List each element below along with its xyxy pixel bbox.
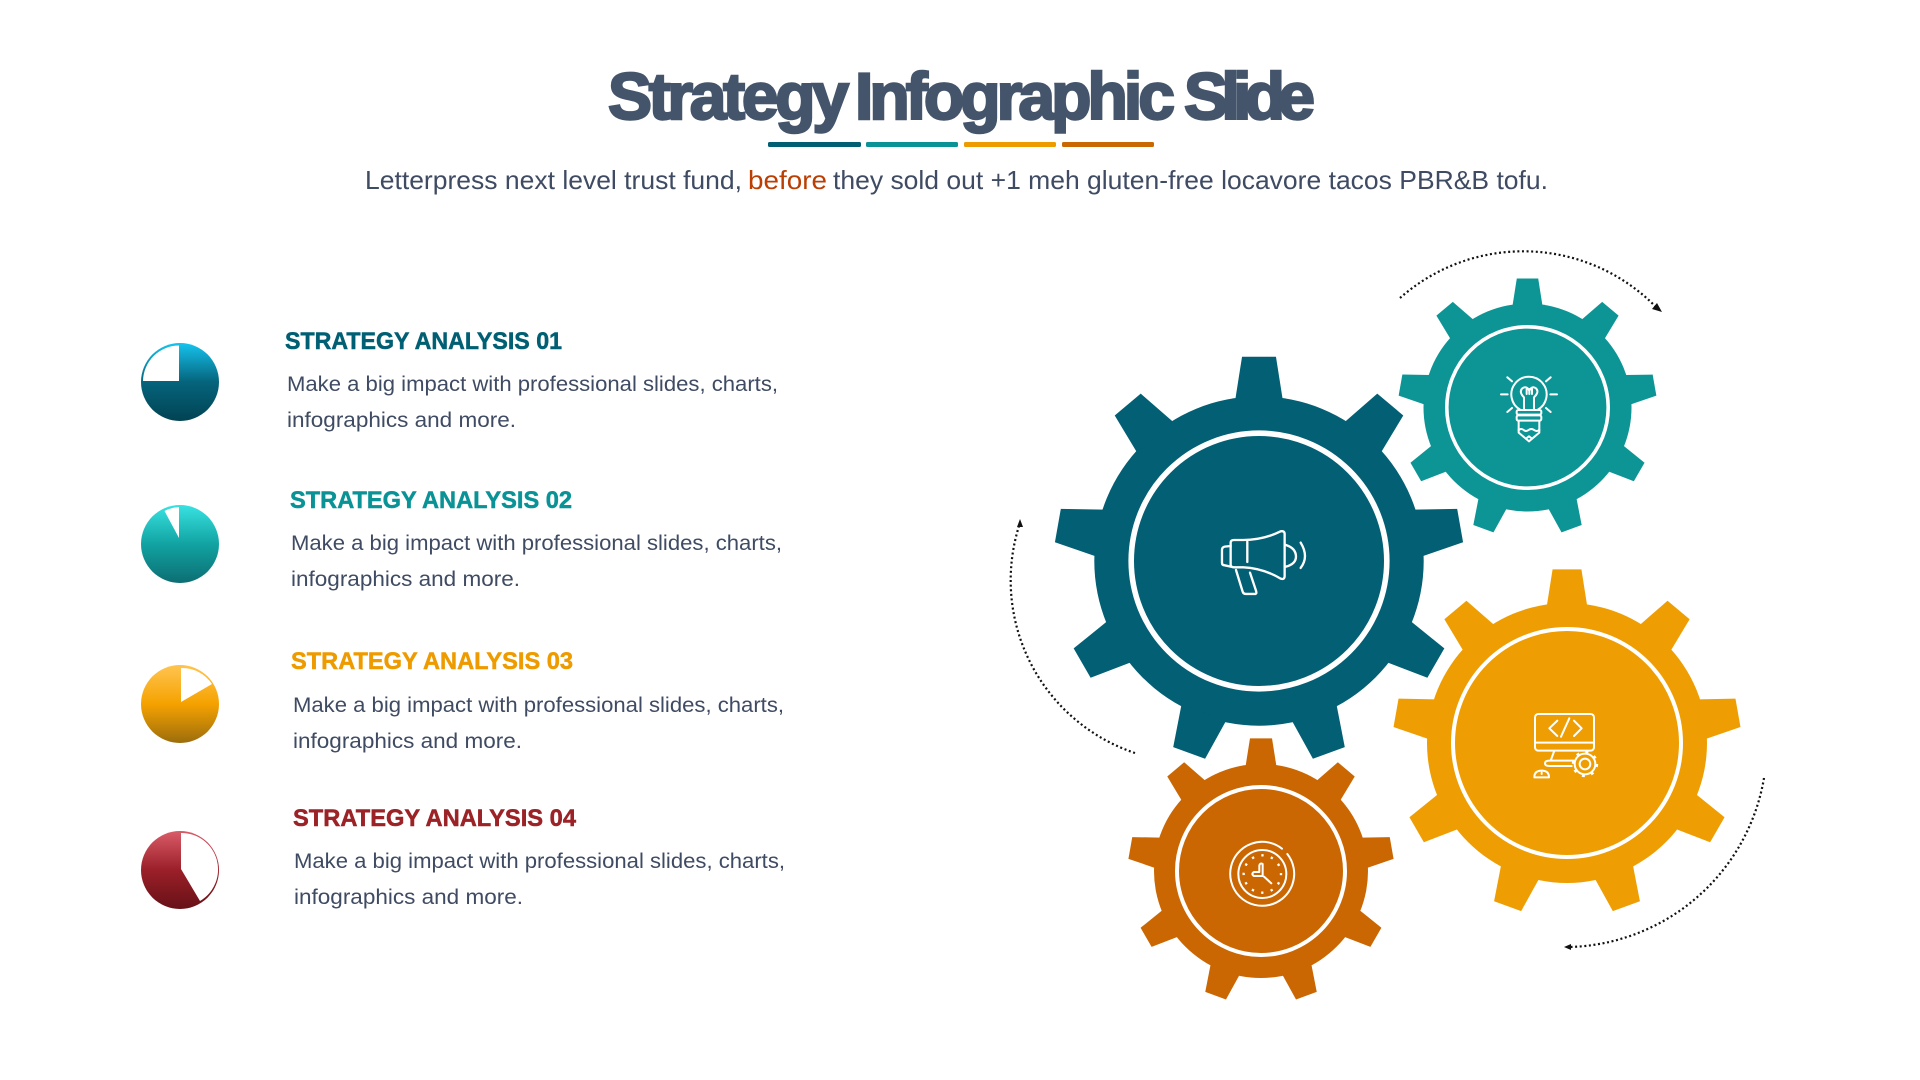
title: Infographic bbox=[855, 59, 1175, 133]
text 2 bbox=[291, 532, 782, 591]
text 4: infographics and more. bbox=[294, 886, 523, 909]
text 4: Make a big impact with professional slides, charts, bbox=[294, 850, 785, 873]
heading 3: STRATEGY ANALYSIS 03 bbox=[291, 648, 573, 675]
text 2: infographics and more. bbox=[291, 568, 520, 591]
pie icon 4 bbox=[141, 831, 219, 909]
gear: yellow bbox=[1393, 569, 1741, 913]
heading 1: STRATEGY ANALYSIS 01 bbox=[285, 328, 562, 355]
pie icon 1 bbox=[141, 343, 219, 421]
icon: clock bbox=[1230, 842, 1294, 906]
pie icon 2 bbox=[141, 505, 219, 583]
item 2 bbox=[141, 487, 782, 591]
gear: teal bbox=[1398, 279, 1657, 534]
subtitle: Letterpress next level trust fund, bbox=[365, 165, 742, 195]
text 3: infographics and more. bbox=[293, 730, 522, 753]
subtitle: they sold out +1 meh gluten-free locavore tacos PBR&B tofu. bbox=[833, 165, 1548, 195]
icon: megaphone bbox=[1222, 531, 1305, 594]
item 3 bbox=[141, 648, 784, 753]
arrow: top dotted arc bbox=[1400, 251, 1662, 312]
arrow: bottom right dotted arc bbox=[1564, 778, 1764, 950]
pie icon 3 bbox=[141, 665, 219, 743]
text 1: Make a big impact with professional slides, charts, bbox=[287, 373, 778, 396]
gear: orange bbox=[1128, 738, 1394, 1001]
heading 4: STRATEGY ANALYSIS 04 bbox=[293, 805, 577, 832]
text 1 bbox=[287, 373, 778, 432]
heading 2: STRATEGY ANALYSIS 02 bbox=[290, 487, 572, 514]
text 2: Make a big impact with professional slides, charts, bbox=[291, 532, 782, 555]
subtitle: before bbox=[748, 165, 827, 195]
title: Strategy bbox=[608, 59, 849, 133]
item 1 bbox=[141, 328, 778, 432]
icon: monitor with code and gear bbox=[1534, 714, 1597, 777]
title bbox=[608, 59, 1315, 133]
title underline bars bbox=[768, 142, 1154, 147]
text 3: Make a big impact with professional slides, charts, bbox=[293, 694, 784, 717]
title: Slide bbox=[1184, 59, 1315, 133]
arrow: left dotted arc bbox=[1011, 519, 1135, 753]
text 4 bbox=[294, 850, 785, 909]
gear: dark teal bbox=[1054, 357, 1464, 761]
subtitle bbox=[365, 165, 1548, 195]
icon: light bulb pencil bbox=[1501, 377, 1557, 441]
text 1: infographics and more. bbox=[287, 409, 516, 432]
text 3 bbox=[293, 694, 784, 753]
item 4 bbox=[141, 805, 785, 909]
